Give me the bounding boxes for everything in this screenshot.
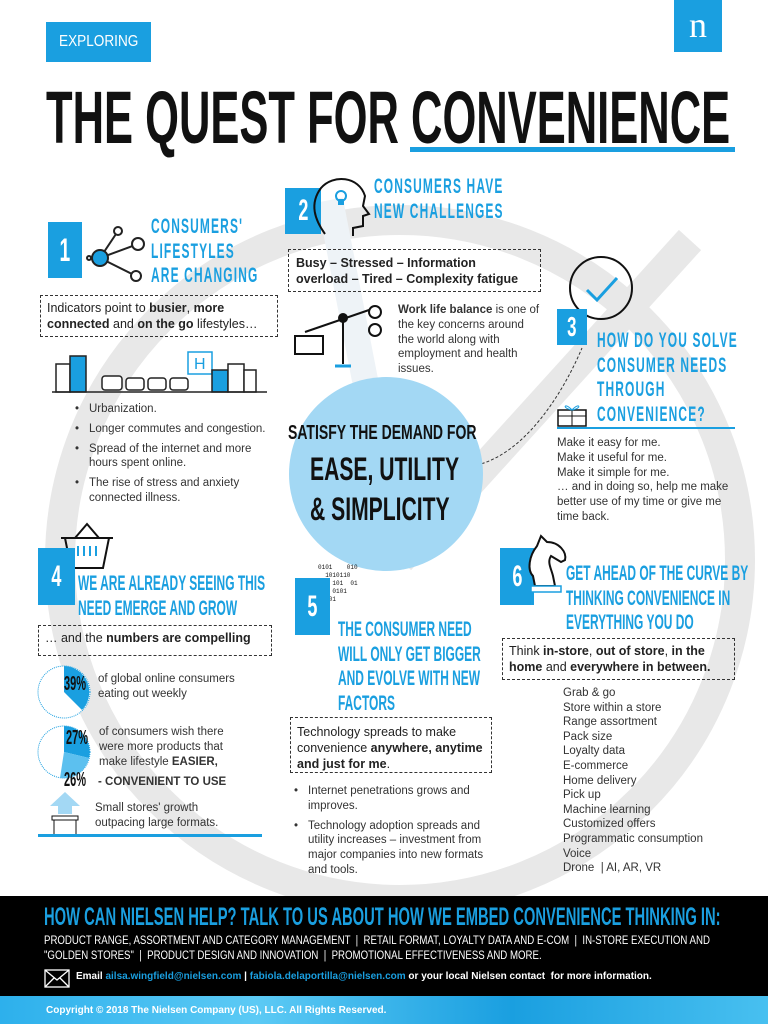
list 6: Voice [563, 848, 591, 860]
heading 5: THE CONSUMER NEED [338, 618, 472, 641]
section 2 [285, 175, 541, 375]
copyright bar [0, 996, 768, 1024]
text: make it easy: Make it useful for me. [557, 452, 667, 464]
underline 4 [38, 834, 262, 837]
underline 3 [557, 427, 735, 429]
section 4: 39% [64, 673, 86, 695]
section 6 [500, 534, 748, 874]
number 3 [557, 309, 587, 345]
section 3 [557, 256, 738, 523]
number 6 [500, 548, 534, 605]
dashed callout 1: Indicators point to busier, more connected and on the go lifestyles… [47, 301, 257, 331]
section 4: outpacing large formats. [95, 817, 218, 829]
icon: network [86, 226, 145, 282]
icon: scale [294, 305, 382, 368]
icon: check circle [569, 256, 633, 320]
heading 3: CONVENIENCE? [597, 402, 706, 426]
list 6: Grab & go [563, 687, 615, 699]
icon: envelope [44, 969, 70, 988]
heading 3: THROUGH [597, 378, 665, 401]
heading 5: FACTORS [338, 692, 395, 714]
list 6: Drone | AI, AR, VR [563, 862, 661, 874]
dashed callout 5: Technology spreads to make convenience anywhere, anytime and just for me. [297, 725, 483, 771]
list 6 [563, 687, 703, 874]
heading 1: LIFESTYLES [151, 240, 235, 262]
section 4: - CONVENIENT TO USE [98, 776, 226, 788]
icon: small store [50, 792, 80, 834]
dashed callout 6 [502, 638, 735, 680]
heading 3 [597, 329, 738, 426]
footer services [44, 935, 710, 962]
dashed callout 2: Busy – Stressed – Information [296, 256, 476, 270]
heading 6: GET AHEAD OF THE CURVE BY [566, 562, 748, 585]
tag: exploring: EXPLORING [59, 33, 138, 50]
list 6: Pack size [563, 731, 612, 743]
dashed connector [482, 348, 582, 464]
section 5 [290, 564, 492, 876]
center circle: & SIMPLICITY [310, 491, 450, 527]
list 6: Store within a store [563, 702, 661, 714]
number 2: 2 [298, 194, 308, 227]
list 6: Pick up [563, 789, 601, 801]
pie 39 [38, 666, 90, 718]
number 4 [38, 548, 75, 605]
icon: binary: 101 01 [332, 580, 358, 587]
footer services: "GOLDEN STORES" | PRODUCT DESIGN AND INNOVATION | PROMOTIONAL EFFECTIVENESS AND MORE. [44, 950, 542, 962]
heading 2: NEW CHALLENGES [374, 200, 504, 222]
dashed callout 6: Think in-store, out of store, in the home and everywhere in between. [509, 644, 710, 674]
heading 5: WILL ONLY GET BIGGER [338, 642, 481, 666]
number 3: 3 [567, 311, 577, 342]
bullets 1: The rise of stress and anxiety connected illness. [89, 477, 239, 504]
email line: Email ailsa.wingfield@nielsen.com | fabiola.delaportilla@nielsen.com or your local Nielsen contact for more information. [76, 971, 652, 982]
text: make it easy [557, 437, 728, 523]
section 4 [38, 522, 272, 837]
dashed callout 2 [288, 249, 541, 292]
section 4: Small stores' growth [95, 802, 198, 814]
list 6: Customized offers [563, 818, 655, 830]
section 4: 27% [66, 727, 88, 749]
icon: binary [318, 564, 358, 603]
title: THE QUEST FOR CONVENIENCE [46, 76, 730, 159]
list 6: Home delivery [563, 775, 636, 787]
bullets 5: Internet penetrations grows and improves. [308, 785, 470, 812]
icon: binary: 1010110 [325, 572, 350, 579]
heading 4: WE ARE ALREADY SEEING THIS [78, 572, 265, 595]
nielsen logo [674, 0, 722, 52]
nielsen logo: n [689, 5, 707, 45]
footer services: PRODUCT RANGE, ASSORTMENT AND CATEGORY MANAGEMENT | RETAIL FORMAT, LOYALTY DATA AND E-COM | IN-STORE EXECUTION AND [44, 935, 710, 947]
heading 6: EVERYTHING YOU DO [566, 611, 694, 634]
heading 1 [151, 215, 258, 287]
text: work life balance: Work life balance is one of the key concerns around the world along with employment and health issues. [398, 304, 539, 375]
icon: horse [528, 534, 566, 593]
number 5: 5 [307, 590, 318, 622]
number 1 [48, 222, 82, 278]
icon: head [313, 178, 371, 236]
copyright bar: Copyright © 2018 The Nielsen Company (US), LLC. All Rights Reserved. [46, 1005, 386, 1016]
number 4: 4 [51, 560, 62, 592]
number 5 [295, 578, 330, 635]
icon: binary: 0101 010 [318, 564, 358, 571]
list 6: Machine learning [563, 804, 651, 816]
heading 3: CONSUMER NEEDS [597, 354, 727, 376]
icon: binary: 0101 [332, 588, 347, 595]
icon: city: H [194, 356, 206, 373]
icon: basket [61, 522, 113, 569]
bullets 5: Technology adoption spreads and utility increases – investment from major companies into new formats and tools. [308, 820, 483, 876]
heading 6 [566, 562, 748, 634]
text: make it easy: Make it simple for me. [557, 467, 669, 479]
heading 6: THINKING CONVENIENCE IN [566, 586, 730, 610]
heading 5 [338, 618, 481, 714]
section 4: eating out weekly [98, 688, 187, 700]
bullets 5 [294, 785, 483, 876]
section 4: were more products that [99, 741, 223, 753]
heading 1: ARE CHANGING [151, 264, 258, 287]
number 1: 1 [60, 232, 70, 268]
dashed callout 4 [38, 625, 272, 656]
center circle [288, 377, 483, 571]
heading 3: HOW DO YOU SOLVE [597, 329, 738, 352]
section 4: 26% [64, 769, 86, 791]
section 4: make lifestyle EASIER, [99, 756, 218, 768]
icon: city [52, 351, 267, 393]
dashed callout 1 [40, 295, 278, 337]
text: make it easy: … and in doing so, help me make better use of my time or give me time back. [557, 481, 728, 523]
list 6: E-commerce [563, 760, 628, 772]
bullets 1: Spread of the internet and more hours spent online. [89, 443, 251, 469]
list 6: Loyalty data [563, 745, 625, 757]
heading 2 [374, 175, 504, 222]
list 6: Programmatic consumption [563, 833, 703, 845]
heading 1: CONSUMERS' [151, 215, 243, 238]
dashed callout 2: overload – Tired – Complexity fatigue [296, 272, 518, 286]
heading 4: NEED EMERGE AND GROW [78, 596, 237, 620]
dashed callout 4: … and the numbers are compelling [45, 631, 251, 645]
heading 5: AND EVOLVE WITH NEW [338, 667, 480, 690]
center circle: EASE, UTILITY [310, 451, 459, 487]
center text: SATISFY THE DEMAND FOR [288, 422, 476, 444]
section 4: of global online consumers [98, 673, 235, 685]
bullets 1: Urbanization. [89, 403, 157, 415]
heading 4 [78, 572, 265, 620]
footer heading: HOW CAN NIELSEN HELP? TALK TO US ABOUT HOW WE EMBED CONVENIENCE THINKING IN: [44, 903, 721, 931]
text: make it easy: Make it easy for me. [557, 437, 661, 449]
heading 2: CONSUMERS HAVE [374, 175, 503, 198]
icon: binary: 0101 [322, 596, 336, 603]
title underline [410, 147, 735, 152]
icon: gift [557, 405, 587, 427]
section 4: of consumers wish there [99, 726, 224, 738]
number 6: 6 [512, 560, 522, 592]
footer [0, 896, 768, 996]
list 6: Range assortment [563, 716, 657, 728]
number 2 [285, 188, 321, 234]
bullets 1: Longer commutes and congestion. [89, 423, 265, 435]
section 1 [40, 215, 278, 504]
bullets 1 [76, 403, 265, 504]
pie 27/26 [38, 726, 90, 778]
circle [289, 377, 483, 571]
tag: exploring [46, 22, 151, 62]
